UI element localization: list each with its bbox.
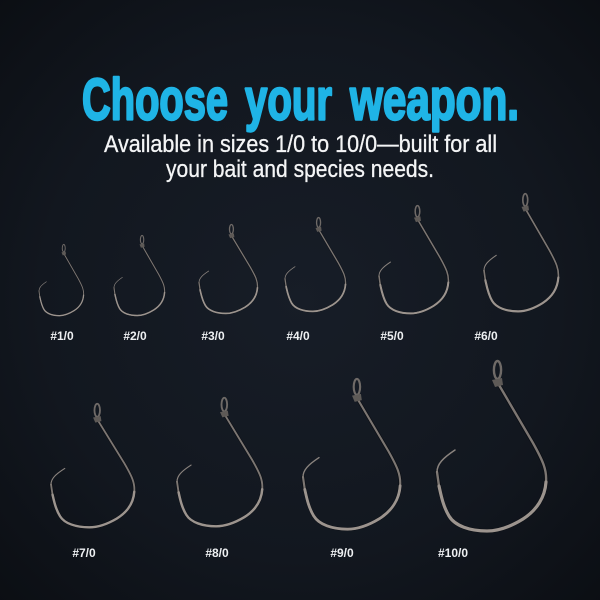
size labels: #1/0 [50, 329, 74, 343]
size labels: #10/0 [438, 546, 468, 560]
size labels: #4/0 [286, 329, 310, 343]
hook #8/0 [177, 398, 262, 526]
hook #1/0 [39, 244, 84, 316]
title: weapon. [349, 68, 519, 132]
hook #4/0 [285, 218, 346, 311]
hook #9/0 [303, 379, 400, 529]
hook #6/0 [484, 194, 558, 311]
size labels: #7/0 [72, 546, 96, 560]
hook #5/0 [379, 206, 448, 313]
size labels [50, 329, 498, 560]
subtitle [104, 131, 497, 183]
size labels: #3/0 [201, 329, 225, 343]
hook #2/0 [114, 235, 165, 316]
size labels: #2/0 [123, 329, 147, 343]
size labels: #6/0 [474, 329, 498, 343]
size labels: #9/0 [330, 546, 354, 560]
title: your [245, 68, 332, 132]
hook #10/0 [437, 361, 546, 531]
size labels: #8/0 [205, 546, 229, 560]
title: Choose [82, 68, 228, 132]
hook #3/0 [199, 225, 258, 313]
size labels: #5/0 [380, 329, 404, 343]
hook #7/0 [51, 404, 134, 527]
subtitle: your bait and species needs. [166, 156, 434, 183]
subtitle: Available in sizes 1/0 to 10/0—built for all [104, 131, 497, 158]
title [82, 68, 519, 132]
